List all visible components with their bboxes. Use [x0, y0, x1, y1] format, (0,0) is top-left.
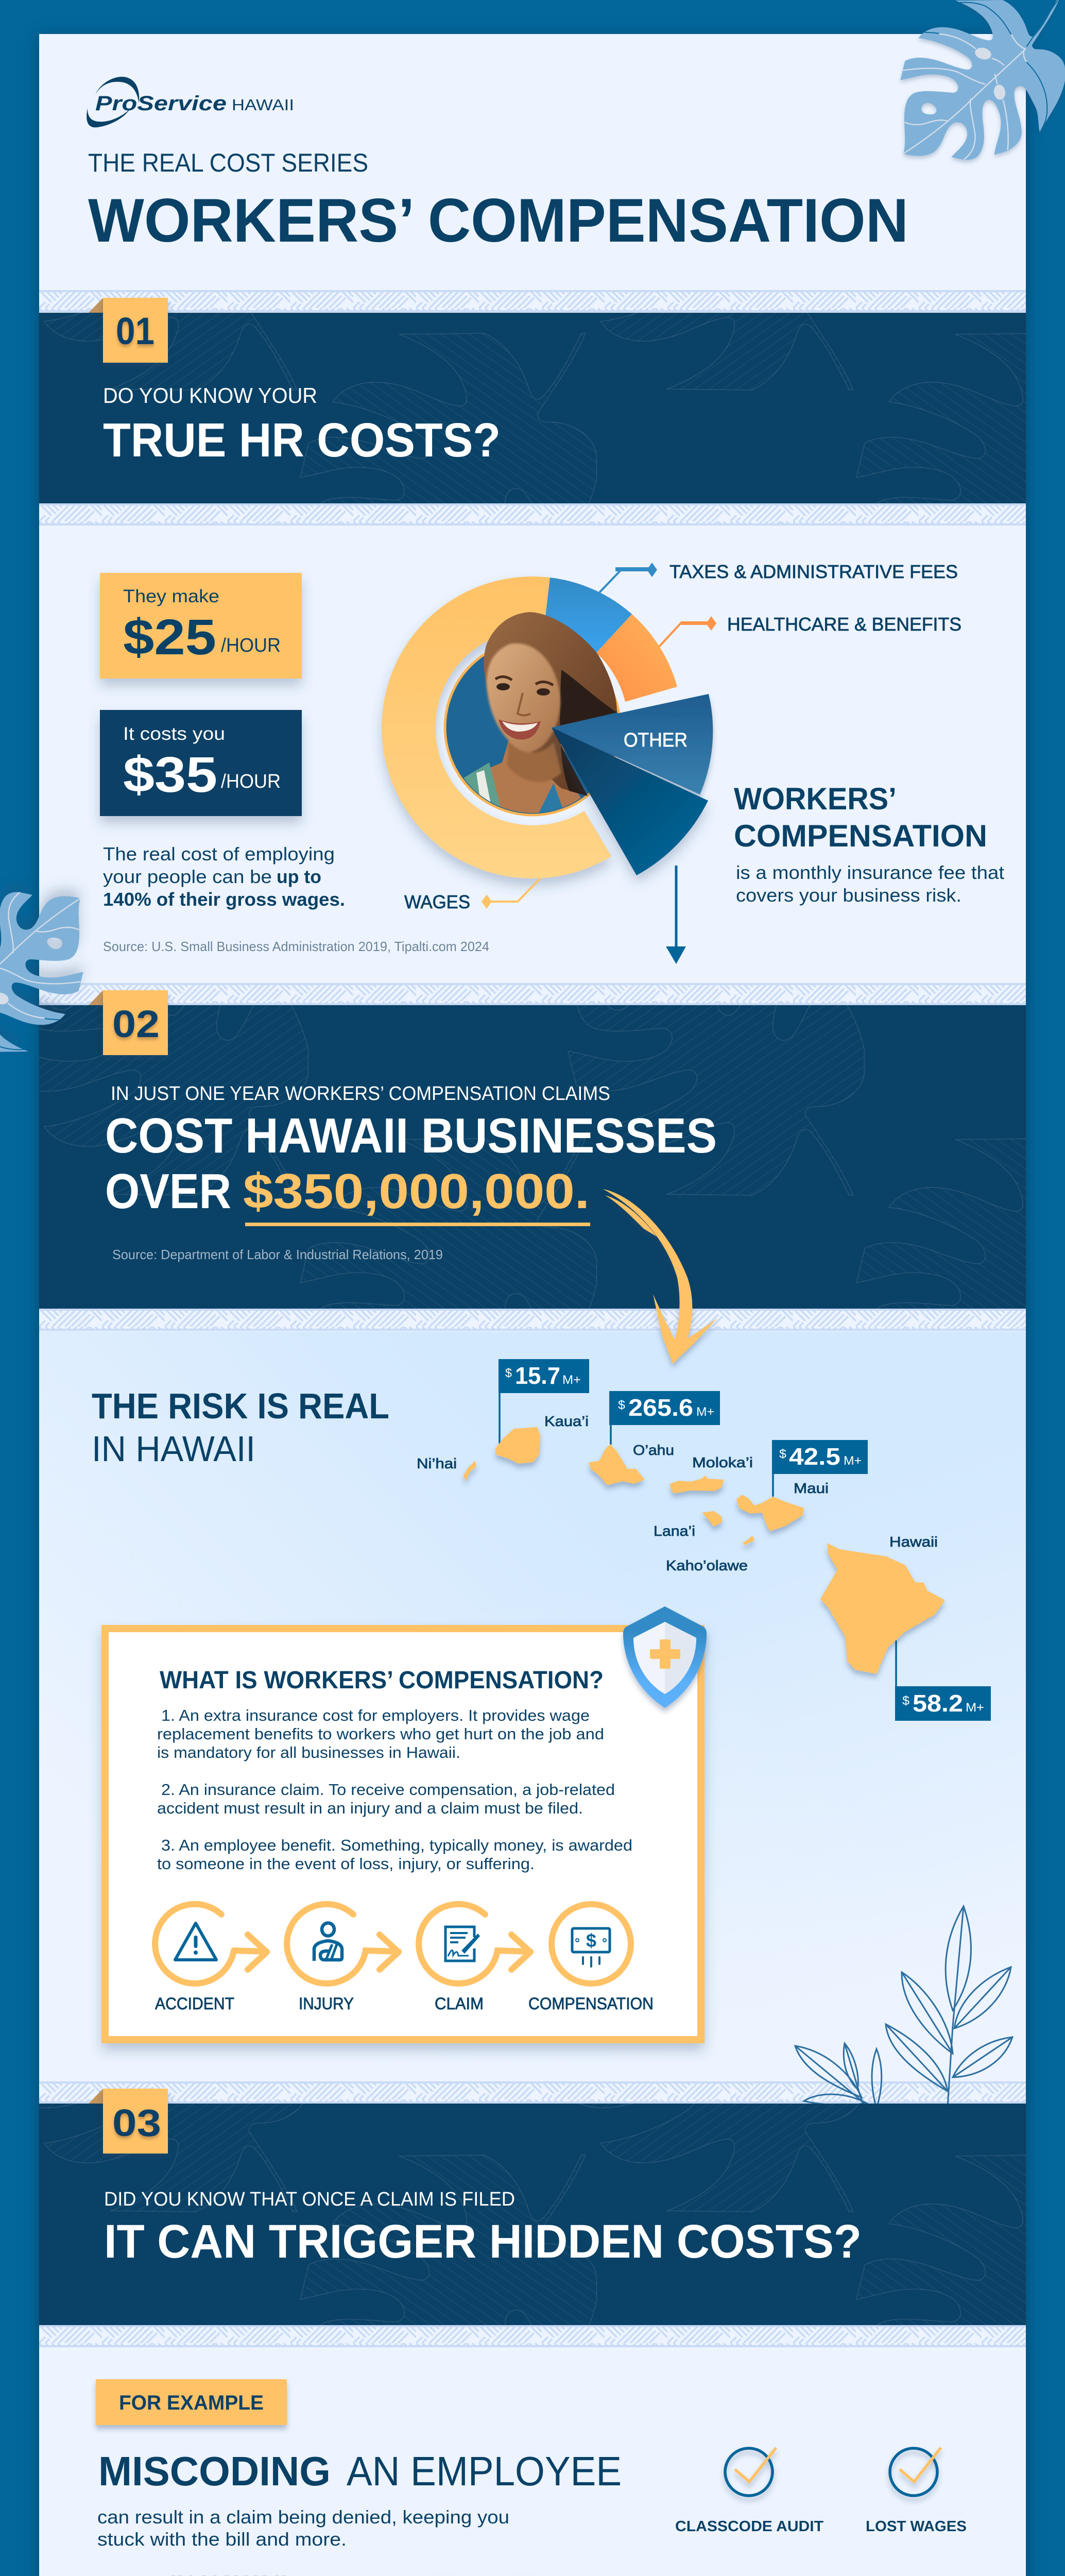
- icon: compensation: $: [586, 1930, 596, 1951]
- panel: section 03 banner: [39, 2089, 1026, 2325]
- source note 1: Source: U.S. Small Business Administration 2019, Tipalti.com 2024: [103, 939, 489, 954]
- text: workers comp definition: WORKERS’: [734, 782, 897, 816]
- map: Hawaiian islands: [417, 1359, 991, 1721]
- section 01 kicker: DO YOU KNOW YOUR: [103, 383, 317, 408]
- card definition list: replacement benefits to workers who get hurt on the job and: [157, 1725, 604, 1743]
- heading: miscoding: MISCODING: [98, 2448, 331, 2494]
- card definition list: 3. An employee benefit. Something, typically money, is awarded: [161, 1836, 632, 1854]
- islands: [463, 1427, 945, 1674]
- section 02 heading: $350,000,000.: [243, 1164, 590, 1219]
- icon: accident: ACCIDENT: [155, 1994, 234, 2013]
- portrait photo: [445, 612, 620, 824]
- text: workers comp definition: [734, 782, 1004, 906]
- text: real cost: [103, 843, 345, 910]
- panel: section 01 banner: [39, 298, 1026, 503]
- flag: Hawaii figure: $: [902, 1694, 909, 1708]
- flag: Kauai figure: 15.7: [515, 1362, 560, 1389]
- callout: it costs you: /HOUR: [221, 771, 281, 792]
- tag: for example: FOR EXAMPLE: [119, 2392, 264, 2414]
- heading: miscoding: AN EMPLOYEE: [347, 2448, 622, 2494]
- island names: Lana’i: [654, 1523, 695, 1539]
- panel: map section background: [39, 1331, 1026, 2081]
- island names: [417, 1413, 938, 1573]
- list: lost wages: LOST WAGES: [866, 2518, 967, 2535]
- list: classcode audit: [675, 2448, 823, 2535]
- flag: Oahu figure: [609, 1391, 720, 1425]
- island names: Ni’hai: [417, 1455, 457, 1471]
- arrow: brush arrow to map: [603, 1189, 718, 1364]
- callout: they make: They make: [123, 586, 219, 606]
- flag: Oahu figure: M+: [696, 1405, 714, 1419]
- island names: Kaua’i: [544, 1413, 589, 1429]
- text: miscoding result: can result in a claim being denied, keeping you: [97, 2506, 509, 2528]
- pie segment: other: [552, 694, 713, 794]
- card definition list: is mandatory for all businesses in Hawaii.: [157, 1743, 460, 1761]
- card definition list: 1. An extra insurance cost for employers. It provides wage: [161, 1706, 590, 1724]
- section 03 number badge: [89, 2089, 168, 2154]
- island names: O’ahu: [633, 1442, 674, 1458]
- card definition list: accident must result in an injury and a claim must be filed.: [157, 1799, 583, 1817]
- text: real cost: your people can be: [103, 866, 272, 887]
- flag: Kauai figure: M+: [562, 1373, 581, 1387]
- card heading: WHAT IS WORKERS’ COMPENSATION?: [160, 1667, 604, 1694]
- island names: Hawaii: [889, 1534, 938, 1550]
- section 02 heading: COST HAWAII BUSINESSES: [105, 1108, 717, 1163]
- icon: claim: [419, 1904, 530, 2013]
- text: real cost: 140% of their gross wages.: [103, 889, 345, 910]
- pie segment: wages: [382, 577, 611, 878]
- callout: they make: $25: [123, 609, 216, 665]
- series label: THE REAL COST SERIES: [88, 148, 368, 177]
- callout: it costs you: [100, 710, 302, 816]
- flag: Hawaii figure: 58.2: [913, 1690, 963, 1717]
- label: taxes: [599, 561, 958, 592]
- flag: Kauai figure: [499, 1359, 589, 1393]
- label: taxes: TAXES & ADMINISTRATIVE FEES: [669, 561, 958, 582]
- label: wages: WAGES: [404, 891, 470, 912]
- icon: compensation: [528, 1904, 654, 2013]
- heading: miscoding: [98, 2448, 622, 2494]
- arrow: down to section 02: [666, 866, 686, 964]
- flag: Oahu figure: $: [618, 1398, 625, 1412]
- flag: Maui figure: $: [779, 1447, 786, 1461]
- flag: Maui figure: 42.5: [789, 1443, 840, 1470]
- section 02 heading: OVER: [105, 1164, 231, 1219]
- section 02 kicker: IN JUST ONE YEAR WORKERS’ COMPENSATION CLAIMS: [111, 1083, 610, 1105]
- chart: cost pie: [382, 577, 713, 878]
- section 01 heading: TRUE HR COSTS?: [103, 413, 501, 467]
- icon: injury: [287, 1904, 399, 2013]
- flag poles: [500, 1393, 896, 1686]
- text: workers comp definition: COMPENSATION: [734, 819, 987, 853]
- section 02 number badge: [89, 990, 168, 1055]
- section 01 number badge: [89, 298, 168, 363]
- list: lost wages: [866, 2448, 967, 2535]
- flag: Oahu figure: 265.6: [628, 1394, 693, 1421]
- text: workers comp definition: is a monthly insurance fee that: [736, 862, 1004, 883]
- island names: Kaho’olawe: [666, 1557, 748, 1573]
- section 02 number badge: 02: [112, 1003, 160, 1045]
- text: real cost: up to: [277, 866, 321, 887]
- illustration: monstera leaf top right: [900, 0, 1065, 160]
- text: miscoding result: [97, 2506, 509, 2550]
- section 01 number badge: 01: [116, 310, 154, 352]
- header logo: HAWAII: [232, 96, 294, 114]
- section 03 number badge: 03: [112, 2102, 161, 2144]
- icon: claim: CLAIM: [435, 1994, 484, 2013]
- icon: accident: [155, 1904, 267, 2013]
- pie segment: workers comp: [552, 727, 708, 875]
- callout: it costs you: $35: [123, 747, 217, 803]
- flag: Kauai figure: $: [505, 1366, 512, 1380]
- text: workers comp definition: covers your business risk.: [736, 885, 961, 906]
- illustration: monstera leaf left upper: [0, 892, 83, 1052]
- card definition list: 2. An insurance claim. To receive compensation, a job-related: [161, 1781, 615, 1799]
- panel: what is workers compensation card: [105, 1629, 701, 2040]
- card definition list: [157, 1706, 632, 1873]
- tag: for example: [96, 2379, 287, 2425]
- island names: Moloka’i: [692, 1454, 753, 1470]
- illustration: plant: [795, 1906, 1012, 2112]
- island names: Maui: [794, 1480, 829, 1496]
- header logo: ProService: [95, 92, 227, 115]
- flag: Maui figure: [772, 1440, 868, 1474]
- heading: the risk is real: [92, 1386, 389, 1469]
- list: classcode audit: CLASSCODE AUDIT: [675, 2518, 823, 2535]
- section 02 heading: [105, 1108, 717, 1226]
- callout: they make: [100, 573, 302, 679]
- flag: Maui figure: M+: [844, 1454, 862, 1468]
- source note 2: Source: Department of Labor & Industrial Relations, 2019: [112, 1247, 443, 1262]
- label: wages: [404, 878, 540, 912]
- text: miscoding result: stuck with the bill and more.: [97, 2529, 347, 2550]
- pie segment: taxes: [544, 578, 632, 653]
- pie segment: healthcare: [596, 614, 677, 702]
- icon: compensation: COMPENSATION: [528, 1994, 654, 2013]
- pie segment: other: OTHER: [624, 730, 688, 751]
- icon: injury: INJURY: [299, 1994, 354, 2013]
- callout: it costs you: It costs you: [123, 724, 225, 744]
- heading: the risk is real: IN HAWAII: [92, 1429, 255, 1469]
- label: healthcare: [659, 614, 961, 647]
- text: real cost: The real cost of employing: [103, 843, 335, 865]
- main title: WORKERS’ COMPENSATION: [88, 186, 908, 255]
- section 03 kicker: DID YOU KNOW THAT ONCE A CLAIM IS FILED: [104, 2189, 515, 2210]
- header logo: [87, 77, 294, 127]
- flag: Hawaii figure: [895, 1686, 991, 1721]
- icon: shield on card: [623, 1606, 707, 1708]
- heading: the risk is real: THE RISK IS REAL: [92, 1386, 389, 1426]
- panel: section 02 banner: [12, 907, 1065, 1427]
- card definition list: to someone in the event of loss, injury, or suffering.: [157, 1855, 535, 1873]
- label: healthcare: HEALTHCARE & BENEFITS: [727, 614, 961, 635]
- callout: they make: /HOUR: [221, 635, 281, 656]
- flag: Hawaii figure: M+: [966, 1701, 984, 1715]
- section 03 heading: IT CAN TRIGGER HIDDEN COSTS?: [104, 2215, 862, 2268]
